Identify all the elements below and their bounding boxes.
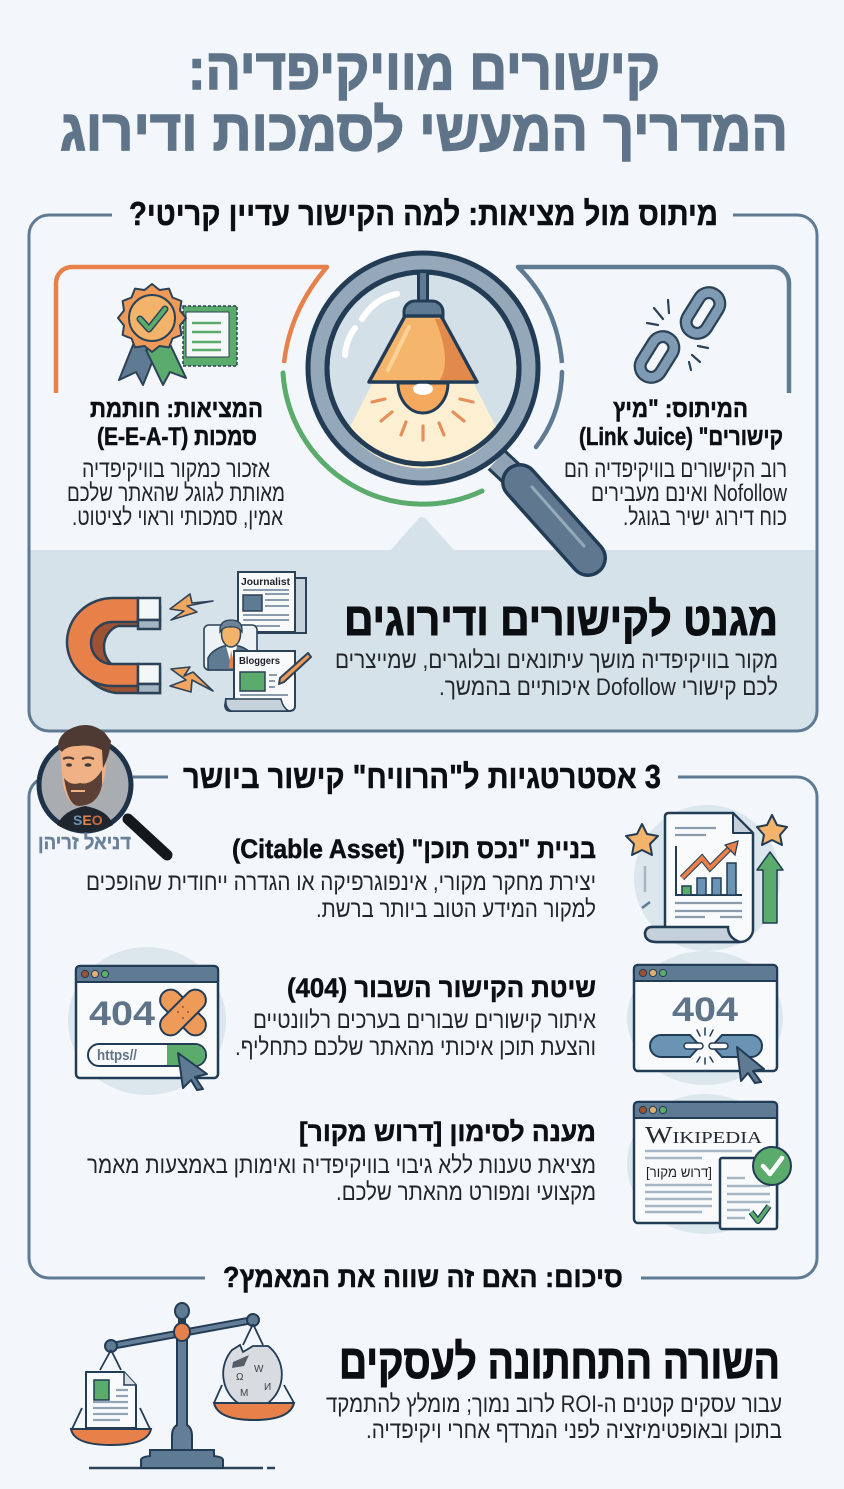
myth bracket (518, 267, 789, 447)
green arc (283, 373, 482, 504)
strategy 1 text: יצירת מחקר מקורי, אינפוגרפיקה או הגדרה ייחודית שהופכים (86, 869, 596, 896)
strategy 2 text: שיטת הקישור השבור (404) (287, 973, 596, 1003)
title: המדריך המעשי לסמכות ודירוג (60, 98, 788, 163)
icon: balance scale: M (240, 1388, 248, 1399)
strategy 3 text: מציאת טענות ללא גיבוי בוויקיפדיה ואימותן באמצעות מאמר (87, 1152, 596, 1179)
icon: certificate with medal (118, 284, 237, 385)
strategy 1 text: למקור המידע הטוב ביותר ברשת. (316, 896, 596, 923)
icon: bloggers document with pencil: Bloggers (239, 655, 280, 667)
icon: magnifier handle (128, 819, 167, 855)
strategy 1 text: בניית "נכס תוכן" (Citable Asset) (232, 834, 596, 864)
magnet heading and text: מגנט לקישורים ודירוגים (344, 593, 778, 645)
icon: broken link browser (627, 951, 783, 1085)
icon: balance scale: Ω (236, 1372, 244, 1383)
icon: citable asset document (626, 805, 787, 951)
icon: balance scale (71, 1303, 294, 1468)
icon: lightning bolts (170, 594, 213, 692)
reality text block: אמין, סמכותי וראוי לציטוט. (72, 504, 283, 531)
magnet heading and text (335, 593, 778, 701)
icon: wikipedia citation page (627, 1094, 791, 1234)
reality text block (67, 395, 285, 531)
myth text block (564, 395, 788, 531)
icon: 404 browser with bandage (68, 947, 226, 1095)
section heading: strategies: 3 אסטרטגיות ל"הרוויח" קישור ביושר (183, 758, 661, 795)
strategy 2 text: איתור קישורים שבורים בערכים רלוונטיים (253, 1007, 596, 1034)
author name: דניאל זריהן (38, 832, 131, 854)
avatar portrait: SEO (73, 812, 103, 828)
icon: journalist newspaper: Journalist (241, 576, 290, 588)
section heading: myth vs reality: מיתוס מול מציאות: למה הקישור עדיין קריטי? (129, 195, 718, 232)
strategy 3 text (87, 1117, 596, 1206)
reality text block: סמכות (E-E-A-T) (97, 423, 257, 451)
myth text block: קישורים" (Link Juice) (579, 423, 783, 451)
icon: wikipedia citation page: [דרוש מקור] (646, 1164, 712, 1180)
strategy 3 text: מענה לסימון [דרוש מקור] (299, 1117, 596, 1147)
icon: magnifier with lamp (308, 253, 588, 558)
section heading: summary: סיכום: האם זה שווה את המאמץ? (223, 1262, 623, 1294)
icon: magnet (67, 598, 160, 693)
strategy 1 text (86, 834, 596, 923)
icon: wikipedia citation page: Wikipedia (645, 1123, 763, 1149)
icon: broken chain (636, 289, 724, 381)
reality bracket (56, 267, 327, 393)
icon: broken link browser: 404 (672, 991, 738, 1029)
reality text block: אזכור כמקור בוויקיפדיה (82, 456, 270, 483)
reality text block: המציאות: חותמת (90, 395, 263, 423)
panel: strategies (29, 758, 817, 1278)
myth text block: Nofollow ואינם מעבירים (591, 480, 788, 507)
author badge (38, 725, 167, 855)
strategy 2 text (235, 973, 596, 1061)
myth text block: רוב הקישורים בוויקיפדיה הם (564, 456, 787, 483)
icon: bloggers document with pencil (225, 651, 311, 711)
magnet heading and text: מקור בוויקיפדיה מושך עיתונאים ובלוגרים, שמייצרים (335, 647, 778, 674)
icon: person portrait (204, 620, 257, 670)
magnet heading and text: לכם קישורי Dofollow איכותיים בהמשך. (439, 674, 778, 701)
myth text block: כוח דירוג ישיר בגוגל. (623, 504, 787, 531)
summary text block (326, 1336, 782, 1444)
panel: myth vs reality (29, 195, 817, 731)
summary text block: עבור עסקים קטנים ה-ROI לרוב נמוך; מומלץ להתמקד (326, 1391, 782, 1418)
strategy 3 text: מקצועי ומפורט מהאתר שלכם. (336, 1179, 596, 1206)
icon: balance scale: И (264, 1382, 271, 1393)
icon: 404 browser with bandage: 404 (89, 995, 155, 1033)
myth text block: המיתוס: "מיץ (613, 395, 748, 423)
strategy 2 text: והצעת תוכן איכותי מהאתר שלכם כתחליף. (235, 1034, 596, 1061)
icon: journalist newspaper (238, 572, 306, 633)
icon: 404 browser with bandage: https// (97, 1047, 138, 1064)
summary text block: בתוכן ובאופטימיזציה לפני המרדף אחרי ויקיפדיה. (366, 1417, 782, 1444)
icon: balance scale: W (254, 1364, 264, 1375)
reality text block: מאותת לגוגל שהאתר שלכם (67, 480, 285, 507)
title: קישורים מוויקיפדיה: (188, 37, 660, 102)
title (60, 37, 788, 163)
